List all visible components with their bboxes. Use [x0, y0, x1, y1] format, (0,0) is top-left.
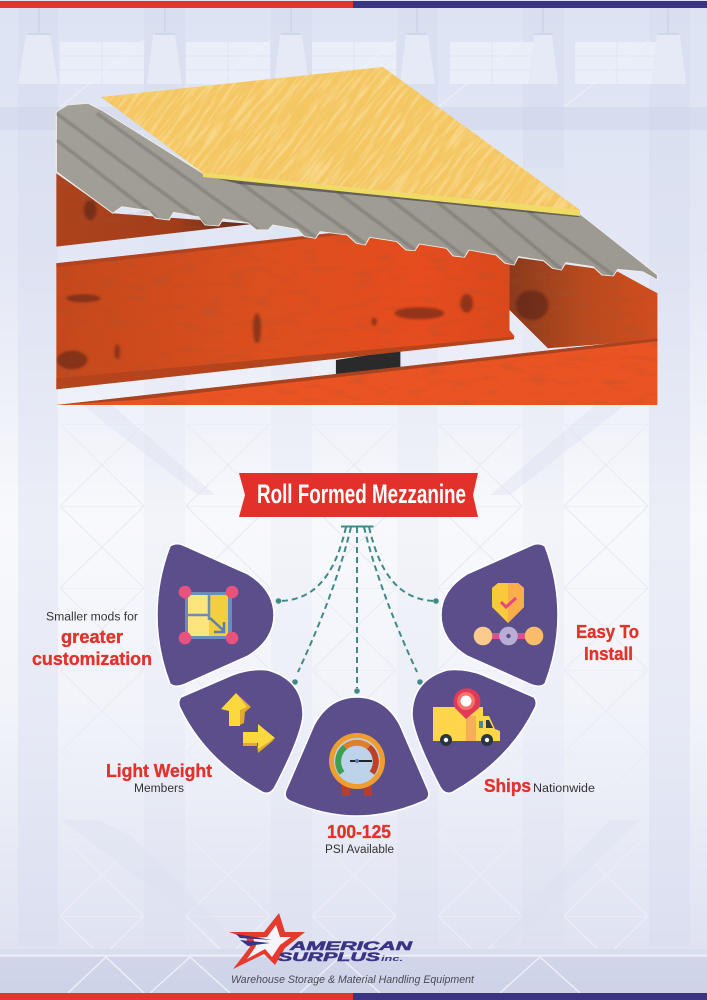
steel post: [336, 350, 400, 375]
icon: truck with pin: [433, 688, 500, 746]
logo: American Surplus: inc.: [381, 954, 403, 963]
label: light weight: Members: [134, 783, 184, 795]
icon: pressure gauge: [329, 733, 385, 796]
label: ships: Nationwide: [533, 783, 595, 795]
logo: American Surplus: [229, 913, 475, 986]
icon: arrows: [221, 693, 275, 753]
logo: American Surplus: SURPLUS: [278, 952, 381, 964]
label: ships: Ships: [484, 776, 531, 796]
right cross beam: [510, 257, 657, 348]
rust marks: [56, 170, 657, 407]
label: light weight: [106, 761, 212, 795]
label: PSI: PSI Available: [325, 844, 394, 856]
label: PSI: [325, 822, 394, 856]
panel: light weight: [179, 670, 303, 793]
corrugated deck: [56, 103, 657, 280]
label: light weight: Light Weight: [106, 761, 212, 781]
label: easy to install: Install: [584, 644, 633, 664]
label: easy to install: [576, 622, 639, 664]
icon: shield and assembly: [474, 583, 543, 645]
icon: star: [229, 913, 305, 969]
panel: easy to install: [441, 544, 558, 686]
label: ships: [484, 776, 595, 796]
label: easy to install: Easy To: [576, 622, 639, 642]
label: customization: [32, 612, 152, 669]
label: PSI: 100-125: [327, 822, 391, 842]
plywood panel: [101, 67, 580, 216]
top colour bar: [0, 1, 707, 8]
logo: American Surplus: Warehouse Storage & Material Handling Equipment: [231, 974, 475, 986]
icon: resize module: [179, 586, 238, 644]
banner: title: Roll Formed Mezzanine: [257, 479, 466, 509]
photo: mezzanine deck on steel beams: [56, 67, 658, 405]
label: customization: greater: [61, 627, 123, 647]
main front beam: [56, 213, 515, 389]
banner: title: [239, 473, 478, 517]
logo: American Surplus: AMERICAN: [288, 941, 413, 953]
label: customization: customization: [32, 649, 152, 669]
panel: PSI: [285, 697, 429, 816]
panel: customization: [157, 544, 274, 686]
back-left beam: [56, 173, 253, 247]
lower front beam: [56, 338, 657, 405]
connector lines: [276, 526, 439, 694]
panel: ships: [412, 670, 536, 793]
label: customization: Smaller mods for: [46, 612, 138, 624]
bottom colour bar: [0, 993, 707, 1000]
